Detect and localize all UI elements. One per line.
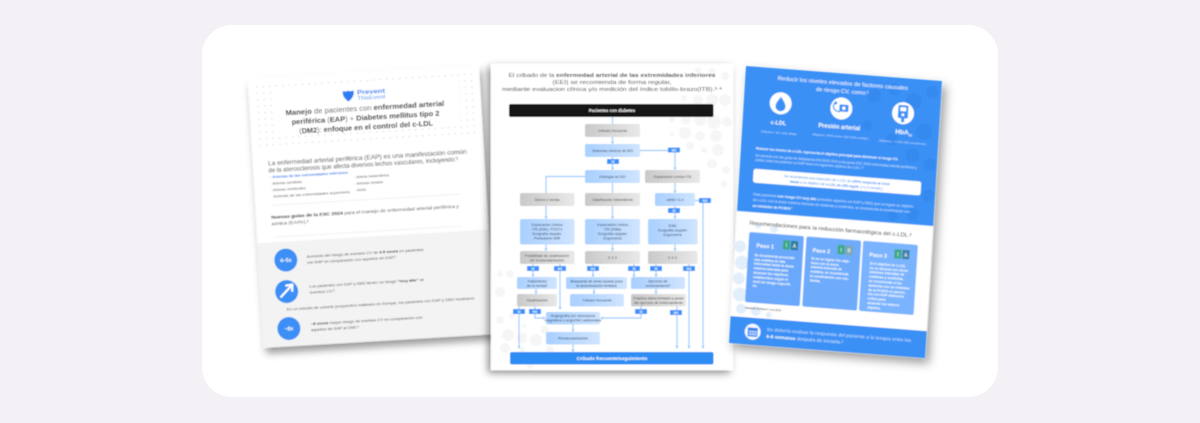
list of vascular beds: · Arterias renales [354, 180, 383, 186]
title: Manejo de pacientes con enfermedad arterial [285, 101, 445, 117]
very high risk paragraph: un inhibidor de PCSK9.² [752, 204, 793, 211]
blue process boxes: IDBs [668, 224, 677, 228]
yes/no tags: SÍ [672, 208, 676, 213]
card: step 3: máximas toleradas de [869, 270, 905, 277]
title: periférica (EAP) + Diabetes mellitus tipo 2 [291, 111, 440, 126]
banner: therapy response evaluation: Se debería evaluar la respuesta del paciente a la terapia entre las [767, 327, 912, 343]
LDL goal paragraph: De acuerdo con las guías de dislipidemia ESC/EAS 2019 y las guías ESC 2024 enfermedad arterial periférica y [755, 154, 917, 170]
icon: glucose meter [879, 101, 928, 146]
card: step 2 [802, 236, 861, 311]
yes/no tags: NO [703, 199, 708, 203]
yes/no tags: NO [558, 267, 563, 271]
blue process boxes: Ergometría [603, 236, 623, 240]
grey decision boxes: Úlcera o herida [534, 197, 560, 202]
box: frequent screening follow-up: Cribado frecuente/seguimiento [577, 356, 647, 362]
yes/no tags: SÍ [517, 309, 521, 314]
heading: de riesgo CV, como:¹ [816, 87, 869, 97]
card: step 1: intensidad hasta la dosis [754, 262, 794, 269]
intro text: de la aterosclerosis que afecta diversos lechos vasculares, incluyendo:¹ [268, 157, 458, 174]
icon: blood pressure cuff: Objetivo: PAS entre 120-129 mmHg ¹ [812, 132, 869, 141]
heading [777, 76, 908, 100]
blue process boxes: Síntomas clínicos de EEI [592, 149, 633, 153]
list of vascular beds: · Aorta [355, 188, 367, 192]
panel: blue risk factor section [737, 66, 942, 226]
yes/no tags: SÍ [639, 309, 643, 314]
card: step 2: Si no se logran los obje- [811, 256, 850, 263]
blue process boxes [517, 144, 698, 344]
blue process boxes: entrenamiento² [646, 284, 671, 288]
list of vascular beds: · Arterias vertebrales [271, 186, 306, 192]
card: step 3: Si el objetivo de c-LDL [870, 261, 906, 268]
blue process boxes: Ecografía doppler [658, 228, 688, 232]
card: step 3: tes con EAP altamente [868, 292, 904, 299]
title: (DM2): enfoque en el control del c-LDL [299, 121, 434, 136]
blue process boxes: Ergometría [663, 233, 683, 237]
grey decision boxes: sin revascularización [530, 259, 564, 263]
LDL goal paragraph: Reducir los niveles de c-LDL representa el objetivo principal para disminuir el riesgo CV. [756, 147, 898, 162]
heading: Reducir los niveles elevados de factores causales [778, 76, 908, 92]
card: step 3: objetivo. [867, 305, 881, 310]
blue process boxes: Cribado frecuente [582, 298, 612, 302]
blue process boxes: ITB (IDBa) [604, 228, 621, 232]
banner: therapy response evaluation [729, 316, 927, 358]
card: step 3 [859, 241, 918, 315]
card: step 2: I [840, 248, 842, 254]
card: step 3: se recomienda el tra- [869, 279, 902, 286]
icon: blood pressure cuff: Presión arterial [818, 123, 861, 133]
blue process boxes: Ecografía doppler [532, 232, 562, 236]
card: step 3: estatinas y ezetimiba, [869, 275, 904, 281]
grey decision boxes: Posibilidad de cicatrización [525, 254, 569, 258]
yes/no tags [513, 148, 711, 315]
very high risk paragraph: Para pacientes con riesgo CV muy alto (incluidos aquellos con EAP y DM2) que no logran su objetivo [753, 193, 913, 209]
LDL goal paragraph [755, 147, 917, 175]
ESC 2024 guideline note: aórtica (EAPA).² [271, 219, 309, 226]
stat: ~8x: aquellos sin EAP al DM2.² [311, 325, 360, 332]
intro text [268, 150, 467, 174]
blue process boxes: Angiografía por resonancia [551, 314, 596, 318]
blue process boxes: Etiología de EEI [599, 175, 626, 179]
card: step 1: alcanzar los objetivos [753, 271, 788, 277]
banner: therapy response evaluation: 6-8 semanas después de iniciarla.² [766, 334, 844, 345]
card: step 1: establecidos según el [753, 275, 788, 282]
blue process boxes: magnética o angioTAC adicionales [545, 318, 602, 322]
grey decision boxes [517, 124, 700, 306]
yes/no tags: NO [533, 310, 538, 314]
flowchart title: (EEI) se recomienda de forma regular, [552, 80, 672, 86]
blue process boxes: Puntuación WIfI [534, 236, 560, 240]
list of vascular beds: · Arteria mesentérica [354, 173, 390, 179]
card: step 3: alcanzar los valores [867, 301, 900, 307]
grey decision boxes: Práctica diaria limitada a pesar [633, 296, 684, 300]
card: step 1: co. [752, 284, 758, 288]
card: step 1: Se recomienda prescribir [754, 253, 795, 260]
list of vascular beds: · Arterias de las extremidades superiores [271, 190, 350, 199]
blue process boxes: ITB (IDBr), POST± [532, 228, 562, 232]
flowchart title: mediante evaluacion clínica y/o medición del índice tobillo-brazo(ITB).³·⁴ [502, 86, 723, 93]
card: step 3: no se alcanza con dosis [869, 266, 908, 273]
logo: Prevent This Event [343, 88, 386, 103]
grey decision boxes: Cicatrización [526, 298, 548, 302]
card: step 1: una estatina de alta [754, 257, 786, 264]
yes/no tags: NO [674, 311, 679, 315]
icon: c-LDL drop [761, 91, 800, 136]
ESC 2024 guideline note: Nuevas guías de la ESC 2024 para el manejo de enfermedad arterial periférica y [271, 204, 460, 220]
heading: pharmacological recommendations: Recomendaciones para la reducción farmacológica del c-LDL.² [749, 220, 912, 239]
logo: Prevent This Event: Prevent [357, 88, 386, 97]
stat: ~8x: ~8 veces mayor riesgo de eventos CV en comparación con [311, 316, 423, 326]
panel: risk statistics [258, 230, 495, 348]
blue process boxes: Tratamiento [527, 280, 547, 284]
grey decision boxes: X X X [608, 256, 618, 260]
document: screening flowchart [491, 64, 733, 370]
card: step 3: Paso 3 [869, 252, 887, 260]
cohort study text: En un estudio de cohorte prospectivo realizado en Europa, los pacientes con EAP y DM2 mostraron [287, 296, 475, 312]
source note: Adaptado de Mach F, et al 2019 [745, 307, 782, 312]
grey decision boxes: X X X [668, 256, 678, 260]
intro text: La enfermedad arterial periférica (EAP) es una manifestación común [268, 150, 467, 167]
document: cardiovascular risk factor targets [728, 66, 942, 358]
card: step 2: la combinación con eze- [810, 274, 849, 281]
stat: very high risk arrow [275, 272, 425, 304]
callout: recommended reduction [753, 169, 921, 195]
blue process boxes: Ejercicio de [648, 280, 668, 284]
stat: 4-5x [274, 240, 424, 272]
card: step 1: nivel de riesgo específi- [753, 279, 791, 286]
blue process boxes: de la herida² [527, 284, 548, 288]
flowchart title [502, 73, 723, 93]
LDL goal paragraph: aórtica, todos los pacientes con EAP tienen los siguientes objetivos de c-LDL:¹·² [755, 158, 864, 171]
card: step 1: A [793, 243, 797, 250]
blue process boxes: Exploración clínica [532, 223, 563, 227]
very high risk paragraph: de c-LDL con la dosis máxima tolerada de estatinas y ezetimiba, se recomienda la combinación con [753, 198, 910, 214]
grey decision boxes: Cribado frecuente [598, 129, 627, 133]
list of vascular beds [270, 168, 391, 199]
list of vascular beds: · Arterias de las extremidades inferiores [270, 171, 348, 179]
yes/no tags: SÍ [654, 266, 658, 271]
card: step 1: Paso 1 [756, 243, 774, 250]
card: step 2: tivos con la dosis [811, 261, 839, 267]
card: step 1 [745, 232, 804, 306]
blue process boxes: Revascularización [558, 336, 588, 340]
blue process boxes: Búsqueda de otras causas para [570, 280, 623, 284]
icon: c-LDL drop: Objetivo: Ver más abajo [761, 129, 797, 136]
icon: blood pressure cuff [812, 95, 871, 141]
title [285, 101, 446, 136]
card: step 2: B [847, 248, 852, 254]
box: frequent screening follow-up [510, 352, 714, 364]
card: step 2: máxima tolerada de [810, 265, 842, 272]
very high risk paragraph [752, 193, 913, 220]
callout: recommended reduction: basal y un objetivo de c-LDL de ≤55 mg/dL (<1,4 mmol/L). [790, 180, 884, 191]
flowchart connectors [519, 117, 703, 352]
yes/no tags: SÍ [632, 266, 636, 271]
card: step 3: de la PCSK9 en pacien- [868, 288, 906, 295]
background panel [202, 25, 998, 397]
stat: very high risk arrow: Los pacientes con EAP y DM2 tienen un riesgo "muy alto" de [309, 278, 424, 289]
box: patients with diabetes [509, 104, 714, 117]
blue process boxes: Ecografía doppler [598, 232, 628, 236]
icon: c-LDL drop: c-LDL [771, 120, 787, 127]
ESC 2024 guideline note [271, 204, 460, 226]
card: step 2: Paso 2 [812, 248, 830, 255]
card: step 1: máxima tolerada para [753, 266, 788, 273]
grey decision boxes: Exploración clínica ITB [654, 175, 692, 179]
grey decision boxes: del ejercicio de entrenamiento [634, 301, 683, 305]
stat: 4-5x: Aumento del riesgo de eventos CV de 4-5 veces en pacientes [307, 248, 424, 259]
icon: calendar [744, 323, 761, 340]
box: patients with diabetes: Pacientes con diabetes [589, 108, 636, 113]
yes/no tags: SÍ [611, 159, 615, 164]
stat: ~8x: ~8x [284, 326, 294, 333]
card: step 3: A [904, 252, 908, 259]
blue process boxes: uit/ibi <1,4 [667, 198, 683, 202]
yes/no tags: NO [672, 148, 677, 152]
stat: 4-5x: con EAP en comparación con aquellos sin EAP.² [307, 256, 397, 265]
stat: 4-5x: 4–5x [280, 258, 292, 264]
blue process boxes: la deambulación limitada [576, 284, 618, 288]
yes/no tags: NO [687, 267, 692, 271]
stat: ~8x [277, 309, 423, 341]
yes/no tags: NO [591, 267, 596, 271]
card: step 2: estatina, se recomienda [810, 270, 849, 277]
list of vascular beds: · Arterias carótidas [270, 180, 302, 186]
card: step 2: timiba. [810, 278, 821, 283]
callout: recommended reduction: Se recomienda una reducción de c-LDL de ≥50% respecto al nivel [784, 174, 890, 187]
stat: very high risk arrow: eventos CV.² [310, 289, 336, 295]
document: peripheral arterial disease overview [248, 65, 495, 348]
card: step 3: tamiento con un inhibidor [868, 283, 911, 291]
icon: glucose meter: HbA [895, 129, 909, 137]
icon: glucose meter: Objetivo: <7,0% (53 mmol/mol) [879, 139, 926, 146]
card: step 3: I [897, 252, 899, 258]
blue process boxes: Exploración clínica [597, 223, 629, 227]
grey decision boxes: Clasificación intermitente [592, 198, 633, 202]
icon: glucose meter: 1c [908, 133, 912, 138]
logo: Prevent This Event: ThisEvent [357, 94, 386, 102]
card: step 1: I [786, 243, 787, 249]
yes/no tags: SÍ [531, 266, 535, 271]
flowchart title: El cribado de la enfermedad arterial de las extremidades inferiores [508, 73, 716, 79]
card: step 3: crítica para [868, 297, 886, 302]
